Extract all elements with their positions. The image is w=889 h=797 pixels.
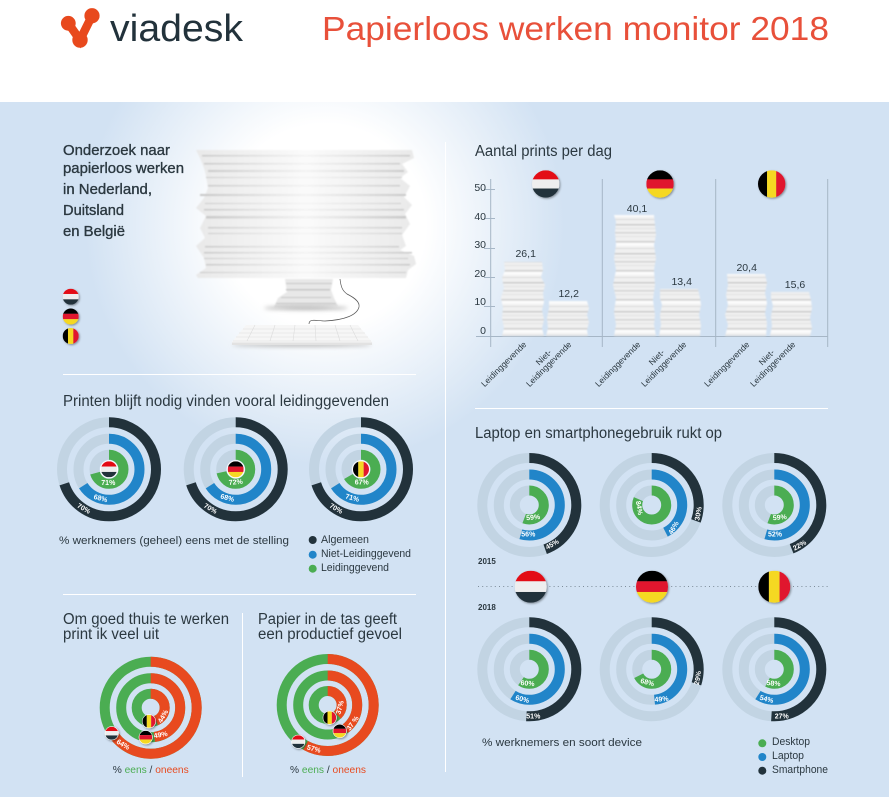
chart axes [476,179,828,347]
heading: thuis werken [63,611,229,643]
legend: device: Laptop [772,750,804,762]
ring chart: België 2015 [727,458,821,553]
year label 2018: 2018 [478,603,496,612]
ring chart: Duitsland 2015: 84% [634,501,643,516]
ring chart: Duitsland 2018: 49% [654,696,670,704]
ring chart: België 2018: 54% [759,695,775,705]
axis labels: 30 [474,239,486,251]
ring chart: Nederland 2018: 51% [526,714,541,721]
bar values: 15,6 [785,279,805,291]
legend: printen: Niet-Leidinggevend [321,548,411,560]
ring chart: Nederland printen: 71% [101,480,116,487]
caption: eens / oneens left: % eens / oneens [113,764,189,776]
ring chart: België printen [314,422,408,516]
ring chart: papier in de tas: 37 % [346,714,361,732]
legend: device: Desktop [772,736,810,748]
ring chart: Nederland printen: 68% [93,494,109,504]
ring chart: Duitsland printen: 72% [229,479,244,487]
ring chart: België 2015: 52% [768,532,783,539]
heading: thuis werken: print ik veel uit [63,626,160,643]
legend: printen [309,534,411,574]
rotated category labels: Leidinggevende [593,339,643,389]
ring chart: Nederland 2015 [482,458,576,552]
rotated category labels: Leidinggevende [479,339,529,389]
ring chart: Duitsland 2015 [605,458,704,552]
bar values: 26,1 [515,248,536,260]
ring chart: thuis werken [105,662,197,754]
monitor stand [274,279,338,307]
ring chart: Nederland 2018: 60% [520,680,535,688]
ring chart: thuis werken: 64% [115,739,131,752]
ring chart: Duitsland 2015: 46% [668,520,681,536]
bar chart: aantal prints per dag [474,170,828,389]
logo wordmark: viadesk [110,8,244,50]
ring chart: thuis werken: 49% [153,731,169,740]
icon: viadesk network mark [61,8,100,48]
ring chart: België printen: 70% [328,503,344,516]
ring chart: België 2015: 59% [773,514,788,522]
ring chart: België printen: 71% [344,493,361,504]
year label 2015: 2015 [478,557,496,566]
ring chart: Nederland 2015: 45% [545,538,561,552]
axis labels: 20 [474,268,486,280]
bar values: 13,4 [671,276,692,288]
ring chart: Duitsland 2015: 30% [694,505,704,521]
keyboard [232,325,372,346]
ring chart: Duitsland printen: 70% [202,503,219,516]
intro text: papierloos werken [63,160,184,177]
title: Papierloos werken monitor 2018 [322,10,829,47]
ring chart: Nederland 2015: 59% [526,514,541,522]
intro text [63,142,184,240]
heading: papier in de tas: een productief gevoel [258,626,402,643]
legend: printen: Leidinggevend [321,562,389,574]
ring chart: Nederland 2018: 60% [514,695,531,705]
ring chart: Nederland printen: 70% [76,503,92,516]
caption: printen: % werknemers (geheel) eens met de stelling [59,535,289,547]
ring chart: thuis werken: 44% [157,708,171,725]
axis labels: 0 [480,325,486,337]
axis labels [474,182,486,337]
ring chart: België 2018 [727,622,821,721]
ring chart: Duitsland printen [189,422,283,516]
cable [309,279,359,324]
ring chart: Nederland 2018 [482,622,576,721]
heading: papier in de tas: Papier in de tas geeft [258,611,398,628]
ring chart: Nederland 2015: 56% [521,532,536,539]
axis labels: 50 [474,182,486,194]
rotated category labels: Niet- [534,347,554,367]
intro text: in Nederland, [63,181,152,198]
bar values: 40,1 [627,203,647,215]
country flags column [63,289,79,344]
paper stack screen [196,150,416,278]
ring chart: Duitsland printen: 68% [219,493,236,504]
ring chart: papier in de tas [282,659,374,755]
ring chart: België 2015: 22% [792,539,808,553]
flags: timeline [515,571,790,603]
chart heading: aantal prints: Aantal prints per dag [475,143,612,160]
heading: printen: Printen blijft nodig vinden vooral leidinggevenden [63,393,389,410]
caption: device: % werknemers en soort device [482,737,642,749]
paper stacks [501,215,812,336]
intro text: Duitsland [63,202,124,219]
legend: device: Smartphone [772,764,828,776]
bar values: 12,2 [558,288,579,300]
legend: printen: Algemeen [321,534,369,546]
bar values: 20,4 [736,262,757,274]
flags above bars [532,170,785,198]
heading: papier in de tas [258,611,402,643]
ring chart: Nederland printen [62,422,156,516]
ring chart: Duitsland 2018: 29% [694,670,703,686]
rotated category labels: Niet- [647,347,667,367]
rotated category labels: Niet- [757,347,777,367]
logo: viadesk [61,8,244,50]
ring chart: België printen: 67% [355,480,369,487]
rotated category labels: Leidinggevende [639,339,689,389]
dotted timeline [478,586,828,588]
caption: eens / oneens right: % eens / oneens [290,764,366,776]
ring chart: papier in de tas: 37% [335,699,346,715]
ring chart: papier in de tas: 57% [306,744,322,755]
heading: laptop en smartphone: Laptop en smartphonegebruik rukt op [475,425,722,442]
bar values [515,203,805,300]
heading: thuis werken: Om goed thuis te werken [63,611,229,628]
rotated category labels: Leidinggevende [748,339,798,389]
dividers [63,142,828,777]
rotated category labels: Leidinggevende [702,339,752,389]
ring chart: België 2018: 58% [766,680,781,688]
ring chart: België 2018: 27% [775,714,789,721]
axis labels: 40 [474,211,486,223]
rotated category labels [479,339,798,389]
ring chart: Duitsland 2018: 68% [639,678,656,689]
rotated category labels: Leidinggevende [524,339,574,389]
legend: device [758,736,828,776]
illustration: computer made of paper [196,150,416,346]
intro text: Onderzoek naar [63,142,170,159]
ring chart: Duitsland 2018 [605,622,703,716]
axis labels: 10 [474,296,486,308]
intro text: en België [63,223,125,240]
